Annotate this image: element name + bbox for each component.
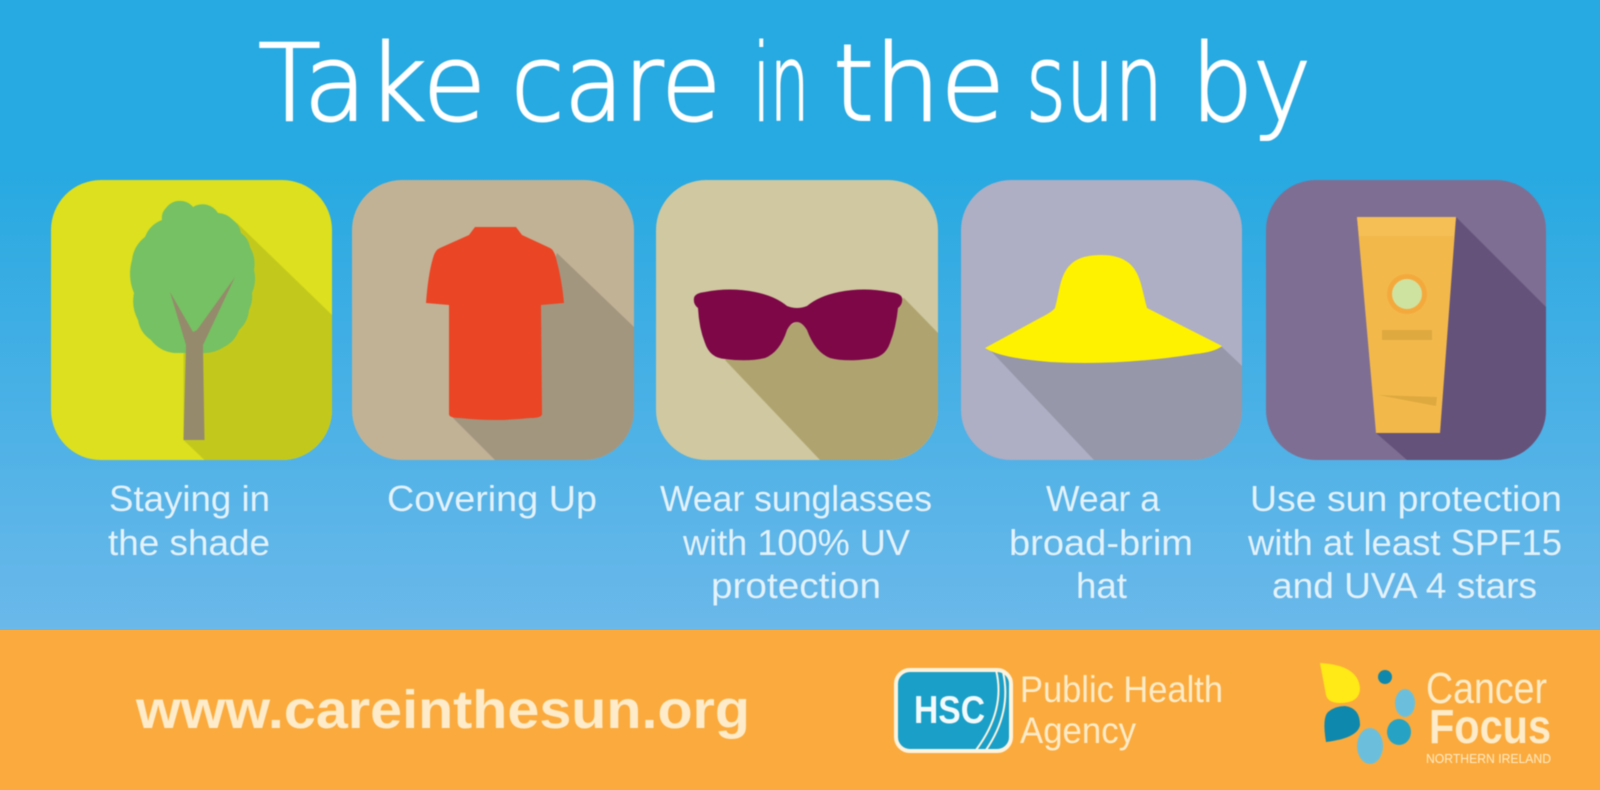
tile: lavender grey (961, 180, 1242, 460)
icon: tree (130, 201, 255, 440)
title: Take (258, 22, 486, 145)
sky background (0, 0, 1600, 630)
caption: hat: Wear a (1046, 478, 1161, 519)
agency name: Agency (1020, 710, 1136, 751)
long shadow: tree (184, 223, 332, 460)
charity name: NORTHERN IRELAND (1426, 751, 1551, 766)
caption: hat: broad-brim (1009, 522, 1193, 563)
agency name (1020, 669, 1223, 751)
logo: Cancer Focus Northern Ireland (1320, 663, 1551, 766)
agency name: Public Health (1020, 669, 1223, 710)
panel: covering up (352, 180, 634, 460)
caption: sunglasses: Wear sunglasses (660, 478, 932, 519)
caption: sunglasses: protection (711, 565, 881, 606)
caption: sun protection: and UVA 4 stars (1272, 565, 1537, 606)
panel: shade (51, 180, 332, 460)
title: care (511, 22, 721, 145)
website url: www.careinthesun.org (135, 680, 750, 740)
icon: HSC badge: HSC (914, 689, 985, 732)
panel: sun protection (1266, 180, 1546, 460)
caption: sunglasses (660, 478, 932, 606)
title: the (833, 22, 1005, 145)
caption: shade: Staying in (109, 478, 270, 519)
caption: sun protection (1247, 478, 1562, 606)
title: by (1191, 22, 1311, 145)
icon: sunscreen tube (1357, 217, 1456, 433)
caption: sunglasses: with 100% UV (682, 522, 910, 563)
long shadow: sunglasses (725, 298, 938, 460)
caption: sun protection: with at least SPF15 (1247, 522, 1562, 563)
caption: covering up: Covering Up (387, 478, 597, 519)
long shadow: t-shirt (453, 253, 634, 460)
long shadow: tube (1376, 217, 1546, 460)
charity name: Cancer (1426, 664, 1547, 713)
icon: leaves and dots (1320, 663, 1415, 764)
caption: shade (108, 478, 270, 563)
panel: hat (961, 180, 1242, 460)
charity name: Focus (1429, 701, 1551, 754)
footer band (0, 630, 1600, 790)
logo: HSC Public Health Agency (896, 669, 1223, 751)
icon: sunglasses (694, 290, 902, 360)
caption: shade: the shade (108, 522, 270, 563)
tile: purple (1266, 180, 1546, 460)
caption: sun protection: Use sun protection (1250, 478, 1562, 519)
tile: yellow (51, 180, 332, 460)
tile: tan (352, 180, 634, 460)
caption: hat: hat (1076, 565, 1127, 606)
icon: hat (985, 255, 1222, 363)
tile: sand (656, 180, 938, 460)
title: in (753, 22, 809, 145)
title: sun (1026, 22, 1163, 145)
long shadow: hat (991, 347, 1242, 460)
charity name (1426, 664, 1551, 766)
panel: sunglasses (656, 180, 938, 460)
caption: hat (1009, 478, 1193, 606)
icon: HSC badge (896, 670, 1011, 751)
title (258, 22, 1311, 145)
icon: t-shirt (426, 227, 564, 420)
